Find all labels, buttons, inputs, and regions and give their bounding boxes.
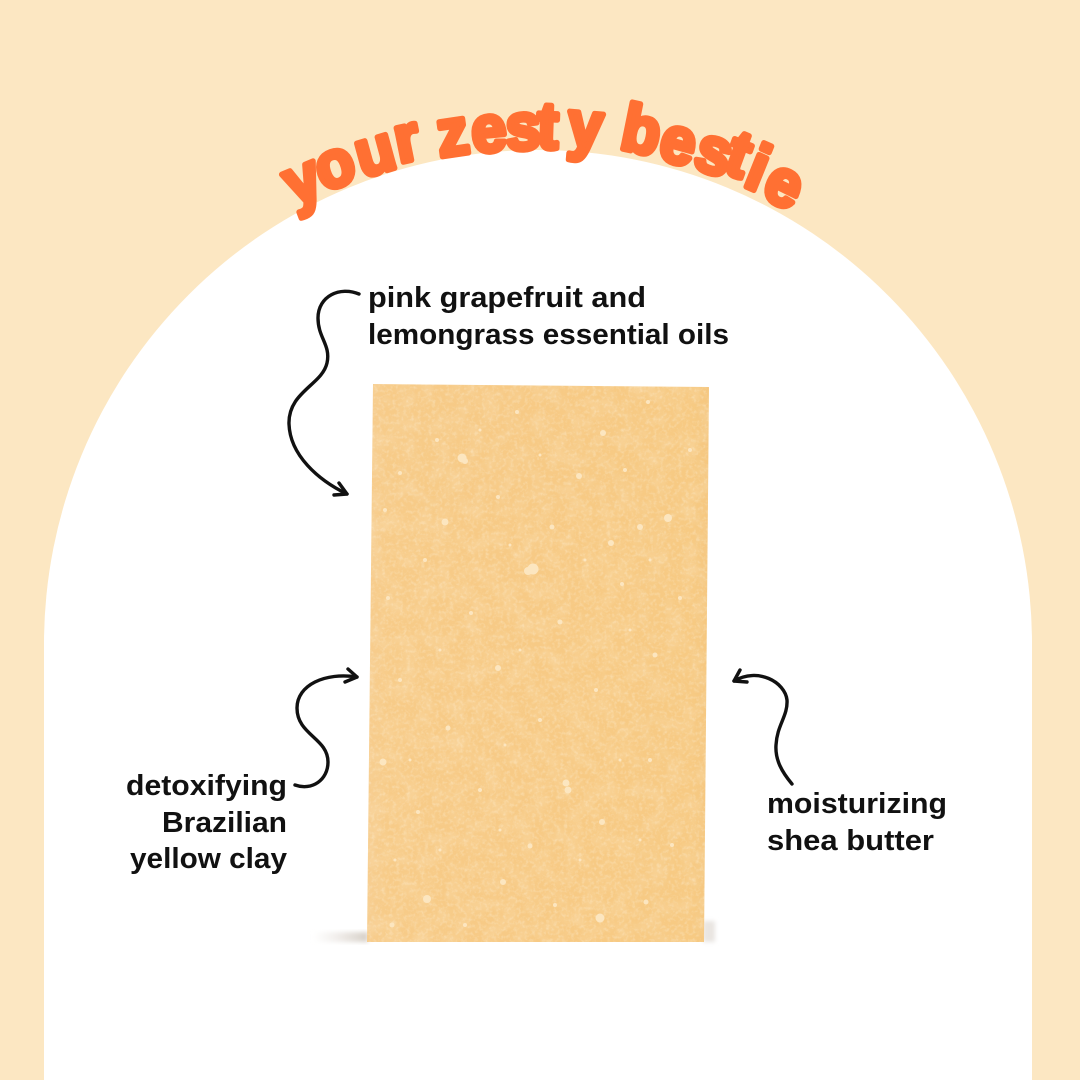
label: essential oils: pink grapefruit and [368,282,646,314]
label: essential oils [368,282,729,351]
arrow: shea butter to soap [734,670,792,784]
soap shadow right [703,921,715,942]
soap body [367,384,709,942]
soap mottled colour [367,384,709,942]
arrow: yellow clay to soap [295,669,357,787]
soap shadow left [312,932,368,942]
white arch panel [44,150,1032,1080]
label: yellow clay: detoxifying [126,770,287,802]
label: yellow clay [126,770,287,875]
soap bar photo [312,384,715,942]
title: curved heading: your zesty bestie [272,87,815,225]
soap fine texture [367,384,709,942]
label: yellow clay: Brazilian [162,807,287,839]
label: essential oils: lemongrass essential oils [368,319,729,351]
label: shea butter: shea butter [767,825,934,857]
label: shea butter: moisturizing [767,788,947,820]
arrow: essential oils to soap [289,291,359,495]
label: shea butter [767,788,947,857]
soap speckles [380,400,692,928]
label: yellow clay: yellow clay [130,843,287,875]
